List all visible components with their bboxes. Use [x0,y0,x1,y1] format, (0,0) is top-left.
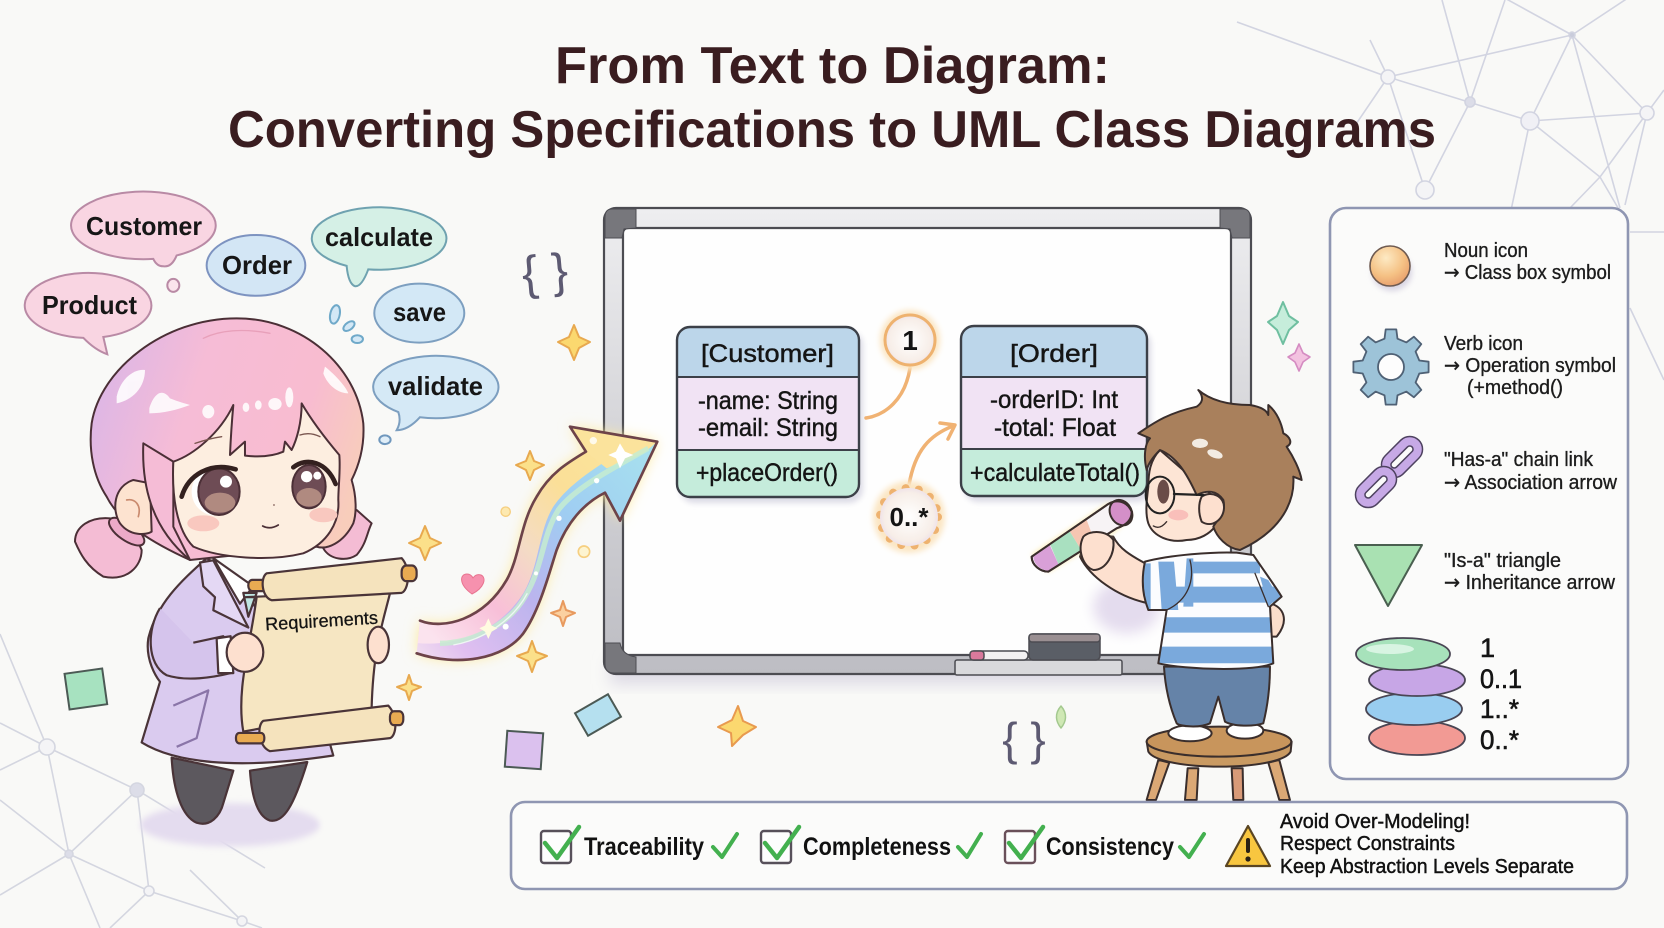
speech bubbles: save [393,297,446,327]
warning text: Respect Constraints [1280,833,1455,855]
girl scroll and hands [227,558,417,751]
has-a text [1444,449,1618,494]
decoration: curly braces top: { } [520,244,570,301]
tray with marker and eraser [955,634,1122,675]
multiplicity badge: 1 with connector: 1 [902,325,918,356]
girl body and lab coat [140,558,333,847]
speech bubbles: calculate [325,222,433,252]
shadow on board [1093,580,1160,633]
hair [1138,390,1302,550]
icon: is-a triangle [1355,545,1422,606]
multiplicity values: 1..* [1480,694,1519,724]
striped shirt [1144,554,1280,668]
verb text: Verb icon [1444,333,1523,355]
UML class: Order: -total: Float [994,414,1116,442]
icon: warning triangle [1226,826,1270,866]
multiplicity badge: 1 with connector [866,310,940,418]
verb text: (+method() [1467,377,1563,399]
speech bubbles: Product [42,290,137,320]
speech bubbles: Order [222,250,292,280]
title: Converting Specifications to UML Class Diagrams [228,101,1436,159]
scroll label: Requirements [264,608,379,634]
UML class: Customer: [Customer] [701,340,834,368]
girl head [75,318,372,578]
item: consistency: Consistency [1046,833,1174,861]
noun text: Noun icon [1444,240,1528,262]
item: consistency [1005,827,1204,863]
icon: multiplicity discs [1356,638,1465,755]
ear [1199,494,1224,524]
socks and trousers [1168,725,1212,741]
verb text: → Operation symbol [1444,353,1616,377]
icon: has-a chain link [1357,438,1421,506]
icon: verb gear [1353,329,1429,405]
multiplicity values: 1 [1480,633,1495,663]
item: traceability: Traceability [584,833,704,861]
UML class: Order: [Order] [1010,340,1098,368]
glasses [1157,480,1169,504]
back arm [1270,603,1284,637]
hand [1081,532,1114,570]
UML class: Customer [677,327,863,503]
character: girl with scroll [75,318,417,847]
title: From Text to Diagram: [555,37,1110,95]
item: completeness: Completeness [803,833,951,861]
UML class: Customer: -email: String [698,414,838,442]
decorations: sparkles and heart [397,302,1310,746]
UML class: Customer: -name: String [698,387,838,415]
multiplicity badge: 0..* with arrow: 0..* [889,502,929,532]
whiteboard [604,208,1251,684]
multiplicity badge: 0..* with arrow [873,423,955,553]
item: completeness [761,827,981,863]
verb text [1444,333,1616,399]
item: traceability [541,827,737,863]
is-a text: "Is-a" triangle [1444,550,1561,572]
character: boy drawing on stool [1032,390,1302,800]
stool [1147,727,1292,800]
face [1146,450,1215,541]
network pattern: top right [1237,0,1664,380]
warning text: Avoid Over-Modeling! [1280,811,1470,833]
legend panel [1330,208,1628,779]
checklist bar [511,802,1627,889]
UML class: Order: -orderID: Int [990,386,1118,414]
decoration: floating squares [65,669,621,769]
speech bubbles: Customer [86,211,202,241]
raised arm [1080,533,1148,603]
UML class: Order [961,326,1151,502]
speech bubbles [25,192,498,444]
noun text [1444,240,1611,284]
rainbow arrow [410,427,657,660]
icon: noun sphere [1370,246,1412,291]
multiplicity values: 0..* [1480,725,1519,755]
title [228,37,1436,159]
speech bubbles: validate [388,371,483,401]
is-a text [1444,550,1616,594]
decoration: curly braces bottom: { } [1002,713,1046,765]
has-a text: "Has-a" chain link [1444,449,1594,471]
multiplicity values [1480,633,1522,755]
noun text: → Class box symbol [1444,260,1611,284]
UML class: Customer: +placeOrder() [696,459,838,487]
network pattern: bottom left [0,634,265,928]
marker [1032,496,1137,572]
has-a text: → Association arrow [1444,470,1618,494]
is-a text: → Inheritance arrow [1444,570,1616,594]
multiplicity values: 0..1 [1480,664,1522,694]
warning text [1280,811,1574,878]
warning text: Keep Abstraction Levels Separate [1280,856,1574,878]
UML class: Order: +calculateTotal() [970,459,1140,487]
